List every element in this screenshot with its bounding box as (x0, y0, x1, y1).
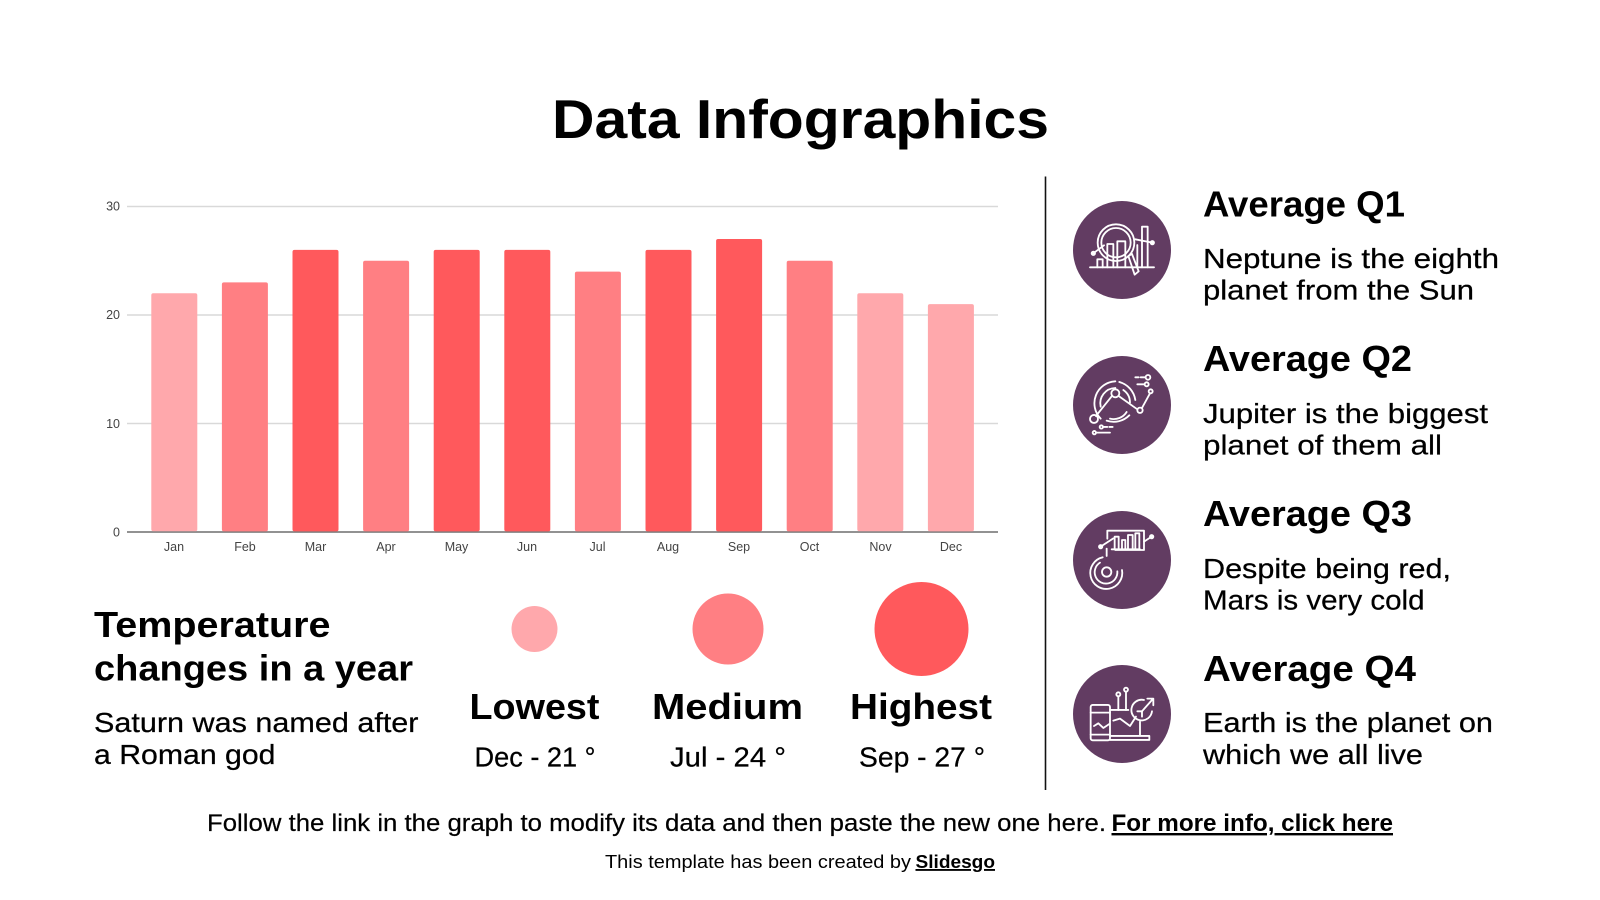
vertical divider (1044, 176, 1046, 790)
heading: Q1: Average Q1 (1203, 184, 1405, 224)
bar chart: temperature by month (106, 200, 998, 554)
panel: average Q3 (1073, 493, 1451, 616)
text: Q1 description (1203, 243, 1499, 306)
bar chart: temperature by month: 0 (113, 526, 120, 540)
legend: lowest: Lowest (470, 686, 600, 727)
bar chart: temperature by month: Jun (517, 540, 537, 554)
legend: highest: Sep - 27 ° (859, 742, 985, 772)
heading: Q4: Average Q4 (1203, 648, 1417, 689)
icon: radial chart with nodes (1073, 356, 1171, 454)
bar chart: temperature by month: 10 (106, 417, 120, 431)
text: Q4 description: Earth is the planet on (1203, 707, 1493, 738)
bar chart: temperature by month: 30 (106, 200, 120, 214)
legend: medium: Jul - 24 ° (670, 742, 786, 772)
bar chart: temperature by month: Apr (376, 540, 396, 554)
title: Data Infographics (552, 89, 1049, 150)
panel: average Q4 (1073, 648, 1493, 770)
bar chart: temperature by month: Oct (800, 540, 820, 554)
template credit: Slidesgo (916, 851, 995, 872)
heading: Q3: Average Q3 (1203, 493, 1412, 534)
bar chart: temperature by month: Jul (590, 540, 605, 554)
legend: lowest: Dec - 21 ° (474, 742, 596, 772)
heading: temperature changes (94, 604, 413, 688)
text: Q2 description (1203, 398, 1488, 460)
bar chart: temperature by month: May (445, 540, 469, 554)
icon: magnifier over bar chart (1073, 201, 1171, 299)
heading: temperature changes: Temperature (94, 604, 330, 645)
bar chart: temperature by month: Dec (940, 540, 962, 554)
bar chart: temperature by month: Feb (234, 540, 256, 554)
icon: phone, laptop and pie chart (1073, 665, 1171, 763)
text: Q3 description: Mars is very cold (1203, 584, 1424, 616)
footer note with link: For more info, click here (1112, 810, 1393, 837)
text block: Saturn description: Saturn was named after (94, 707, 418, 738)
panel: average Q2 (1073, 338, 1488, 460)
heading: Q2: Average Q2 (1203, 338, 1412, 379)
text block: Saturn description: a Roman god (94, 739, 276, 770)
legend: highest: Highest (850, 686, 992, 727)
text: Q4 description (1202, 707, 1493, 770)
legend: highest (850, 582, 992, 772)
text: Q1 description: Neptune is the eighth (1203, 243, 1499, 274)
panel: average Q1 (1073, 184, 1499, 306)
text: Q2 description: Jupiter is the biggest (1203, 398, 1488, 429)
text block: Saturn description (94, 707, 418, 770)
bar chart: temperature by month: Jan (164, 540, 184, 554)
template credit: This template has been created by (605, 851, 912, 872)
bar chart: temperature by month: Aug (657, 540, 679, 554)
icon: dashboard and target (1073, 511, 1171, 609)
text: Q3 description (1203, 553, 1451, 616)
bar chart: temperature by month: Sep (728, 540, 750, 554)
legend: medium: Medium (652, 686, 803, 727)
text: Q2 description: planet of them all (1203, 430, 1442, 460)
bar chart: temperature by month: Nov (869, 540, 892, 554)
legend: lowest (470, 606, 600, 772)
text: Q4 description: which we all live (1202, 739, 1423, 770)
legend: medium (652, 594, 803, 772)
footer note with link: Follow the link in the graph to modify its data and then paste the new one here. (207, 810, 1106, 837)
heading: temperature changes: changes in a year (94, 648, 413, 688)
bar chart: temperature by month: 20 (106, 308, 120, 322)
text: Q1 description: planet from the Sun (1203, 274, 1474, 306)
bar chart: temperature by month: Mar (305, 540, 326, 554)
text: Q3 description: Despite being red, (1203, 553, 1451, 584)
